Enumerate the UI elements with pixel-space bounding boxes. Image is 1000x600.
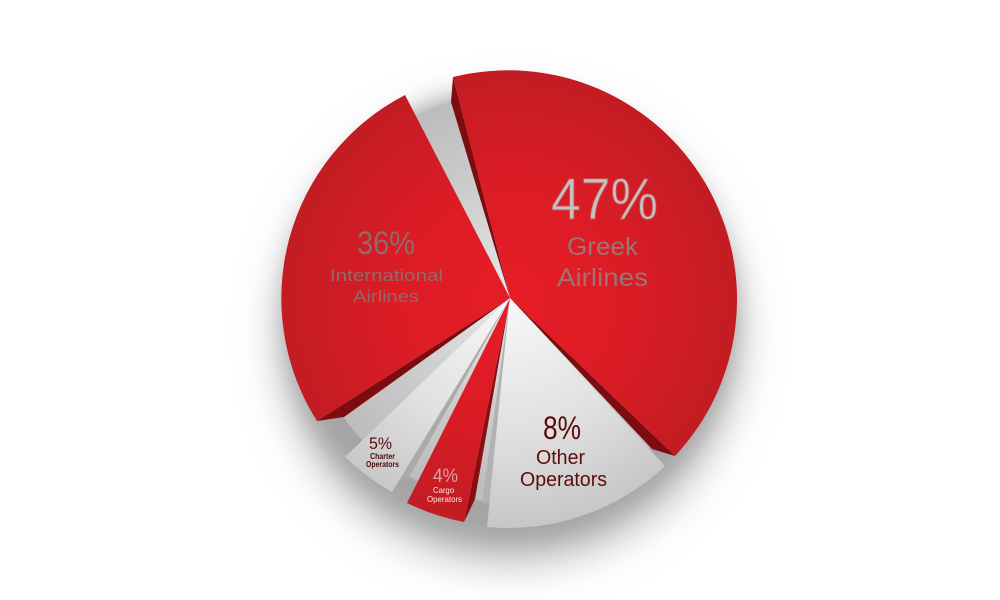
label: 8% Other Operators: Operators [520,469,607,491]
shadow strip: beside charter slice [398,298,510,482]
label: 47% Greek Airlines: Greek [567,233,639,261]
slice: International Airlines 36% [281,95,510,421]
label: 5% Charter Operators [366,434,399,469]
slice: Charter Operators 5% [345,298,510,492]
label: 5% Charter Operators: Charter [370,452,395,461]
label: 4% Cargo Operators: Cargo [433,485,454,495]
drop shadow [282,94,738,560]
shadow strip: beside other operators slice [482,298,510,503]
label: 47% Greek Airlines [551,167,658,292]
label: 36% International Airlines [330,225,443,306]
label: 36% International Airlines: 36% [357,225,415,261]
label: 5% Charter Operators: Operators [366,460,399,469]
Greek Airlines upper side face [451,77,510,298]
label: 47% Greek Airlines: Airlines [557,264,648,292]
Greek Airlines lower side face [510,298,675,456]
label: 8% Other Operators: 8% [543,410,581,446]
label: 5% Charter Operators: 5% [369,434,392,453]
label: 36% International Airlines: International [330,266,443,285]
label: 47% Greek Airlines: 47% [551,167,658,232]
label: 4% Cargo Operators [427,466,462,504]
label: 4% Cargo Operators: 4% [433,466,458,487]
Greek Airlines top face [453,70,737,456]
Cargo top face [407,298,510,522]
label: 8% Other Operators: Other [536,447,585,469]
slice: Cargo Operators 4% [407,298,510,522]
slice: Other Operators 8% [487,298,665,528]
Cargo side face [464,298,510,522]
International Airlines top face [281,95,510,421]
label: 4% Cargo Operators: Operators [427,494,462,504]
International Airlines side face [317,298,510,421]
base disc [305,93,715,503]
label: 8% Other Operators [520,410,607,491]
label: 36% International Airlines: Airlines [353,287,419,306]
slice: Greek Airlines 47% [451,70,737,456]
